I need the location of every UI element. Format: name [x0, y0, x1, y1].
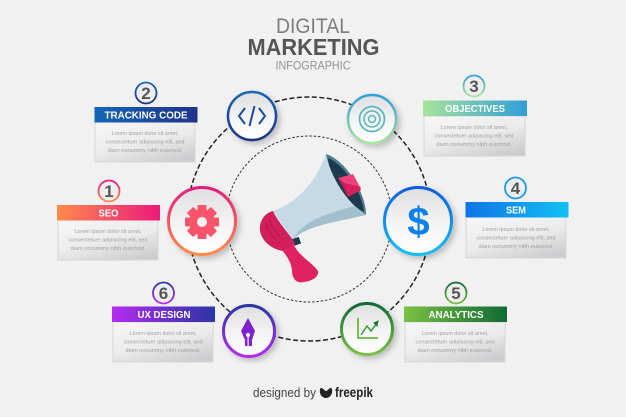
body	[424, 116, 525, 156]
megaphone cap	[338, 178, 361, 197]
footer credit: designed by	[253, 385, 316, 400]
megaphone grip	[281, 243, 318, 282]
text: consectetuer adipiscing elit, sed	[106, 140, 184, 146]
header: OBJECTIVES	[445, 103, 505, 115]
header: ANALYTICS	[428, 309, 484, 321]
text	[124, 331, 202, 354]
header: TRACKING CODE	[104, 110, 188, 122]
node: pen	[224, 306, 274, 356]
title: MARKETING	[248, 34, 380, 60]
text: diam nonummy nibh euismod.	[418, 348, 493, 354]
icon: pen nib	[241, 318, 255, 346]
card 4: SEM	[466, 178, 568, 258]
text: Lorem ipsum dolor sit amet,	[130, 331, 197, 337]
text: Lorem ipsum dolor sit amet,	[422, 331, 489, 337]
number 5: 5	[451, 284, 461, 303]
body	[466, 217, 566, 258]
node: chart	[342, 304, 392, 354]
text	[476, 227, 556, 250]
number 4: 4	[511, 179, 521, 198]
text: consectetuer adipiscing elit, sed	[476, 236, 556, 242]
title: DIGITAL	[276, 15, 350, 38]
card 5: analytics	[404, 282, 507, 362]
body	[405, 322, 505, 362]
text: diam nonummy nibh euismod.	[70, 246, 146, 252]
footer credit: freepik	[335, 385, 373, 400]
text: consectetuer adipiscing elit, sed	[434, 134, 514, 140]
text: consectetuer adipiscing elit, sed	[124, 340, 202, 346]
body	[113, 322, 213, 362]
text	[106, 131, 184, 154]
icon: dollar sign: $	[407, 200, 430, 244]
body	[58, 220, 158, 260]
text	[68, 229, 148, 252]
megaphone bell interior	[328, 158, 364, 212]
node: target	[348, 95, 396, 143]
text: diam nonummy nibh euismod.	[478, 244, 554, 250]
text: Lorem ipsum dolor sit amet,	[482, 227, 550, 233]
header: SEO	[98, 208, 118, 220]
text: consectetuer adipiscing elit, sed	[416, 340, 494, 346]
card 2: tracking code	[94, 82, 198, 162]
megaphone horn	[273, 154, 366, 240]
text: diam nonummy nibh euismod.	[126, 348, 201, 354]
megaphone handle	[260, 211, 295, 251]
title	[248, 15, 380, 72]
node: dollar	[384, 188, 452, 254]
card 1: SEO	[57, 180, 160, 260]
text: Lorem ipsum dolor sit amet,	[112, 131, 179, 137]
megaphone illustration	[260, 154, 366, 282]
title: INFOGRAPHIC	[276, 60, 350, 72]
node: gear	[168, 188, 236, 254]
megaphone horn shade	[293, 206, 366, 240]
text	[434, 125, 514, 148]
card 3: objectives	[423, 76, 527, 156]
megaphone connector	[292, 237, 301, 246]
node: code	[228, 92, 276, 140]
icon: gear	[185, 205, 219, 239]
icon: line chart	[358, 318, 378, 338]
card 6: UX design	[112, 282, 215, 362]
outer dashed ring	[187, 97, 431, 341]
icon: target	[360, 106, 384, 132]
number 2: 2	[141, 84, 151, 103]
megaphone bell rim	[326, 154, 366, 215]
number 3: 3	[469, 77, 479, 96]
icon: code brackets	[239, 106, 265, 126]
text: diam nonummy nibh euismod.	[436, 142, 512, 148]
number 6: 6	[159, 284, 168, 303]
text: Lorem ipsum dolor sit amet,	[74, 229, 142, 235]
number 1: 1	[104, 182, 114, 201]
footer credit	[253, 385, 373, 400]
text: consectetuer adipiscing elit, sed	[68, 238, 148, 244]
inner dotted ring	[226, 136, 392, 302]
header: SEM	[506, 204, 526, 216]
text	[416, 331, 494, 354]
header: UX DESIGN	[138, 309, 190, 321]
icon: freepik logo	[320, 388, 332, 398]
text: Lorem ipsum dolor sit amet,	[440, 125, 508, 131]
body	[95, 122, 195, 162]
text: diam nonummy nibh euismod.	[108, 148, 183, 154]
